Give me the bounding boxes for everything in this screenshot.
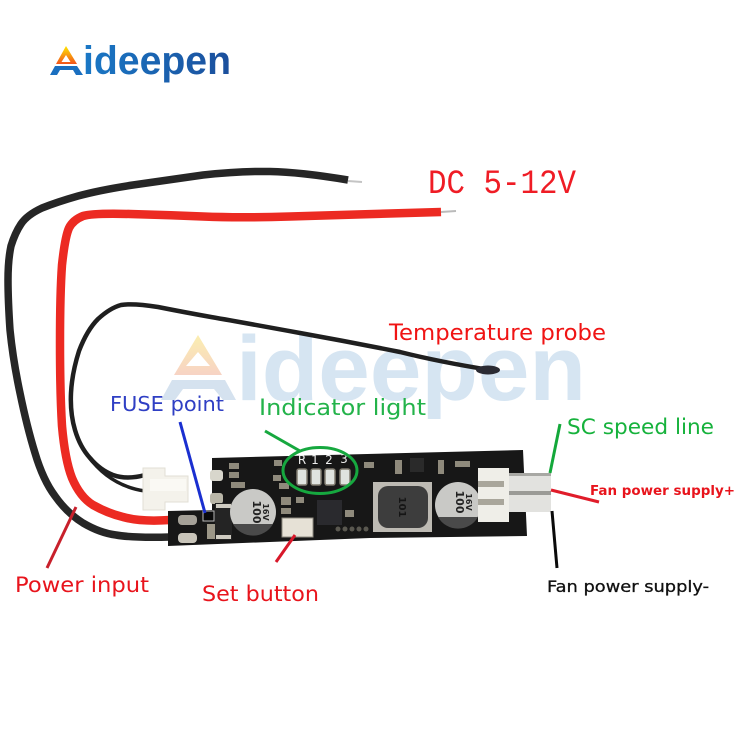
dark IC blocks: [410, 458, 424, 472]
indicator arrow: [265, 431, 300, 451]
set button arrow: [276, 535, 295, 562]
watermark: [161, 318, 586, 420]
watermark triangle: [174, 335, 222, 375]
inductor: [373, 482, 432, 532]
LED labels: 2: [325, 453, 333, 467]
logo: Aideepen: [50, 39, 231, 83]
indicator ring: [283, 448, 357, 494]
fuse point pads: [178, 503, 232, 543]
fan minus label: Fan power supply-: [547, 577, 709, 596]
LED labels: [298, 452, 348, 467]
chip: [317, 500, 342, 525]
left capacitor: 16V: [261, 503, 270, 521]
fan ribbon cable: [507, 473, 551, 512]
right capacitor: 100: [453, 491, 466, 514]
black power wire: [8, 171, 348, 537]
PCB board: [168, 450, 527, 546]
FUSE point label: FUSE point: [110, 392, 224, 416]
white JST connector: [143, 468, 188, 510]
FUSE arrow: [180, 422, 205, 513]
temperature probe label: Temperature probe: [388, 321, 606, 346]
logo base stroke of A: [50, 66, 83, 75]
contact row: [336, 526, 368, 532]
DC voltage label: DC 5-12V: [428, 166, 577, 204]
logo wordmark: ideepen: [83, 39, 231, 83]
red wire tip: [441, 211, 456, 212]
watermark base: [161, 380, 236, 400]
icon: logo triangle: [56, 46, 77, 64]
fan plus arrow: [551, 490, 599, 502]
LED labels: 3: [340, 452, 348, 466]
black wire tip: [348, 181, 362, 182]
fan plus label: Fan power supply+: [590, 484, 735, 499]
SC speed line label: SC speed line: [567, 415, 714, 439]
set button label: Set button: [202, 582, 319, 606]
SC arrow: [550, 424, 560, 473]
right capacitor: 16V: [464, 493, 473, 511]
power input arrow: [47, 507, 76, 568]
red power wire: [60, 212, 441, 521]
power input label: Power input: [15, 573, 149, 597]
probe tip: [476, 366, 500, 374]
indicator light label: Indicator light: [259, 396, 426, 421]
temperature probe wire: [71, 304, 490, 491]
inductor: 101: [396, 497, 407, 517]
small components: [229, 460, 470, 517]
LED labels: R: [298, 453, 306, 467]
left capacitor: [230, 489, 276, 536]
fan minus arrow: [552, 511, 557, 568]
fan connector: [478, 468, 509, 522]
left capacitor: 100: [250, 501, 263, 524]
indicator LEDs: [297, 469, 350, 485]
LED labels: 1: [311, 453, 319, 467]
set button: [282, 518, 313, 537]
watermark wordmark: ideepen: [236, 318, 586, 420]
white connector pads: [210, 470, 223, 481]
right capacitor: [435, 482, 481, 529]
